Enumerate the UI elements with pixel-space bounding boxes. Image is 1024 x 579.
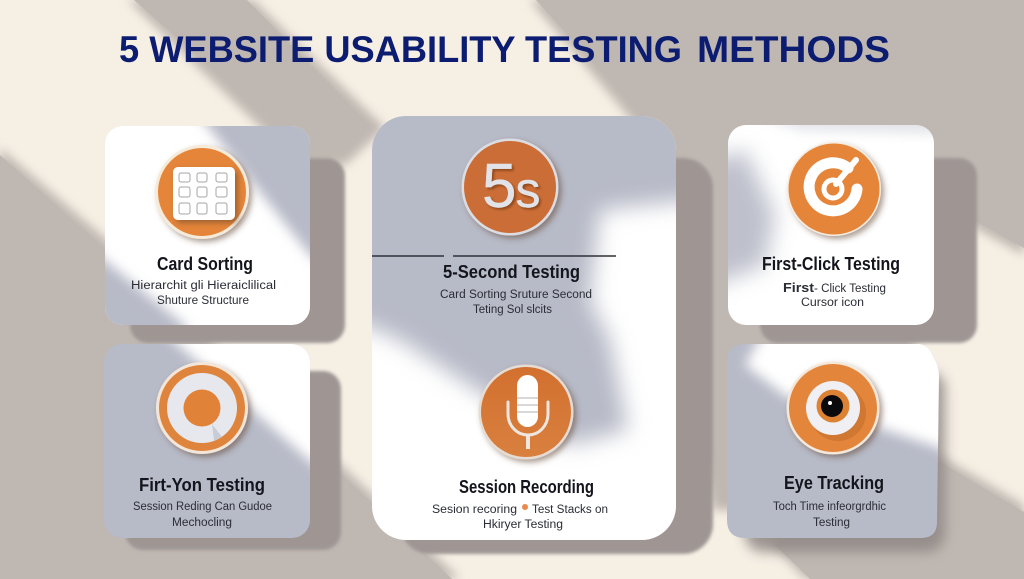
icon: target cursor [787,142,881,236]
heading: first-click testing: First-Click Testing [762,254,900,274]
icon: eye [786,362,880,454]
description: first-click testing: - Click Testing [814,283,886,295]
description: session recording: Sesion recoring [432,504,517,516]
description: eye tracking: Toch Time infeorgrdhic [773,501,886,513]
icon: 5s badge [462,138,558,236]
title: 5 WEBSITE USABILITY TESTING [119,29,682,70]
description: card sorting [131,280,276,307]
description: first-you testing: Mechocling [172,517,232,529]
description: session recording [432,504,608,531]
panel: eye tracking [727,344,952,560]
icon: card grid [155,145,249,239]
icon: 5s badge: 5s [482,152,540,221]
heading: 5-second testing: 5-Second Testing [443,262,580,282]
description: first-click testing [783,280,886,309]
description: first-click testing: Cursor icon [801,297,864,309]
description: session recording: Hkiryer Testing [483,519,563,531]
dividers [372,255,616,257]
heading: card sorting: Card Sorting [157,254,253,274]
icon: microphone [478,364,574,460]
description: eye tracking [773,501,886,529]
heading: eye tracking: Eye Tracking [784,473,884,493]
description: first-you testing: Session Reding Can Gudoe [133,501,272,513]
panel: card sorting [105,126,347,345]
description: session recording: Test Stacks on [532,504,608,516]
description: first-click testing: First [783,280,815,295]
icon: circle target [156,362,248,454]
heading: session recording: Session Recording [459,477,594,497]
description: card sorting: Shuture Structure [157,295,249,307]
description: 5-second testing [440,289,592,316]
panel: center column [372,116,715,556]
description: first-you testing [133,501,272,529]
panel: first-click testing [728,125,979,345]
heading: first-you testing: Firt-Yon Testing [139,475,265,495]
panel: first-you testing [104,344,343,551]
description: 5-second testing: Card Sorting Sruture Second [440,289,592,301]
description: card sorting: Hierarchit gli Hieraiclilical [131,280,276,292]
title: METHODS [697,29,890,70]
description: eye tracking: Testing [813,517,850,529]
description: 5-second testing: Teting Sol slcits [473,304,552,316]
